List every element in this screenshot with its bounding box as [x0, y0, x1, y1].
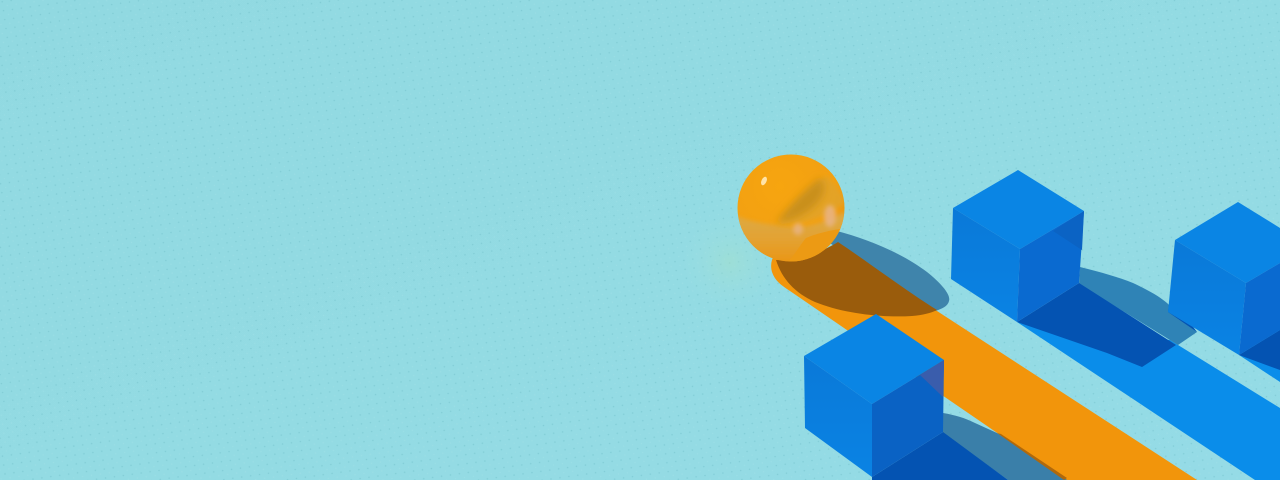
cube three: [1168, 202, 1280, 355]
cube two: [951, 170, 1084, 322]
cube two shadow: [1017, 267, 1197, 367]
sphere: [736, 154, 848, 265]
sphere shadow: [776, 228, 949, 316]
cube one shadow: [872, 413, 1067, 480]
orange strip: sphere's long band: [771, 240, 1197, 480]
cube one: [804, 314, 944, 477]
blue strip: cube two's long band: [1017, 322, 1280, 480]
cube three shadow: [1168, 297, 1280, 382]
